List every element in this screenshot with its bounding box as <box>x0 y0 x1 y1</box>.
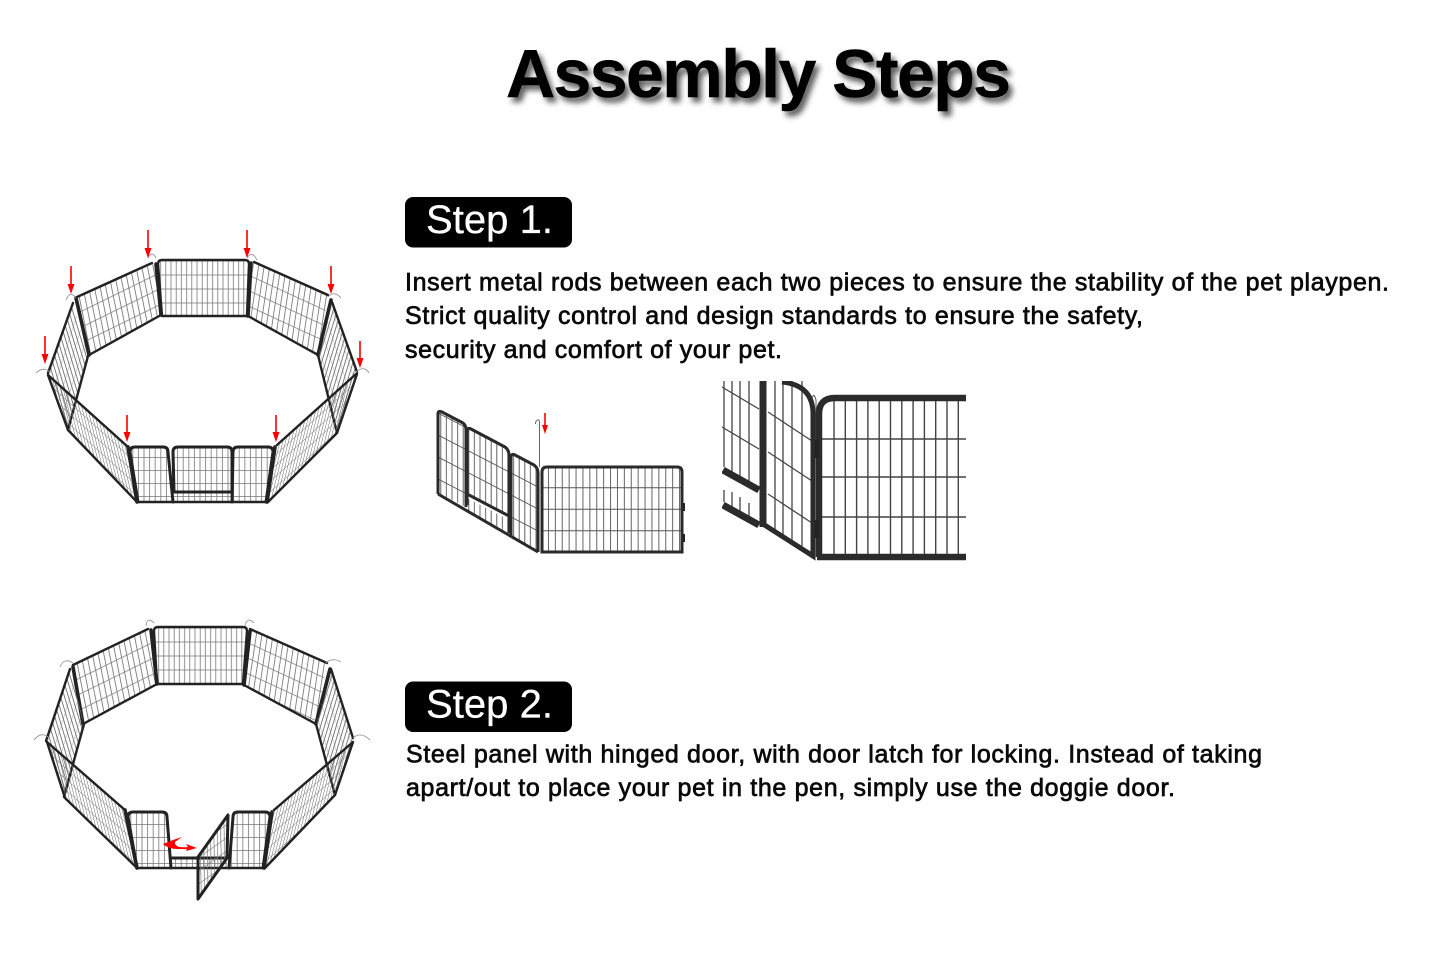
arrow: red door swing arrow <box>163 837 197 851</box>
mesh: main panel <box>820 400 966 555</box>
text block: step 1 description: Insert metal rods between each two pieces to ensure the stability of the pet playpen. <box>405 268 1389 296</box>
arrow: red down arrow <box>542 413 548 434</box>
rod <box>812 395 816 440</box>
illustration: full playpen with insertion arrows <box>36 230 369 502</box>
panel: front left <box>48 375 137 502</box>
frame: second panel <box>763 382 813 556</box>
title: Assembly Steps <box>506 36 1011 112</box>
text block: step 2 description: Steel panel with hinged door, with door latch for locking. Instead of taking <box>406 740 1262 768</box>
panel: front left <box>47 742 137 868</box>
hooks: metal rods <box>34 620 370 740</box>
text block: step 1 description: security and comfort of your pet. <box>405 336 782 364</box>
panel: back left <box>76 263 161 355</box>
panel: front with opening <box>128 812 270 868</box>
panel: back right <box>244 629 330 724</box>
panel: front door section <box>130 447 273 502</box>
badge: step 1: Step 1. <box>426 198 553 242</box>
panel: right side <box>316 669 353 795</box>
panel: folded door section <box>438 411 538 552</box>
panel: left side <box>46 669 84 797</box>
illustration: playpen with open door <box>34 620 370 899</box>
badge: step 2 <box>405 682 572 732</box>
panel: front right <box>264 742 353 868</box>
badge: step 1 <box>405 197 572 248</box>
text block: step 2 description: apart/out to place your pet in the pen, simply use the doggie door. <box>406 774 1175 802</box>
frame: door edge <box>723 381 763 527</box>
text block: step 1 description: Strict quality control and design standards to ensure the safety, <box>405 302 1143 330</box>
frame: bottom rail <box>817 554 966 560</box>
illustration: close-up of connected panels <box>722 381 966 557</box>
arrows: red insertion arrows <box>42 230 364 442</box>
text block: step 2 description <box>406 740 1262 802</box>
mesh: second panel <box>768 381 812 546</box>
panel: back left <box>73 629 157 724</box>
panel: back centre <box>158 260 249 316</box>
illustration: rod insertion between two panels <box>438 411 685 552</box>
panel: back right <box>248 262 331 355</box>
panel: front right <box>267 374 357 502</box>
panel: left side <box>48 303 88 430</box>
panel: right side <box>318 302 357 433</box>
panel: open door <box>198 815 228 899</box>
mesh: left door panel <box>722 381 759 517</box>
frame: main panel <box>819 398 966 557</box>
hinges <box>815 440 819 538</box>
text block: step 1 description <box>405 268 1389 364</box>
panel: back centre <box>154 627 247 684</box>
rod <box>536 420 540 467</box>
badge: step 2: Step 2. <box>426 682 553 726</box>
panel: flat panel <box>542 467 685 552</box>
hooks: metal rods <box>36 254 369 373</box>
